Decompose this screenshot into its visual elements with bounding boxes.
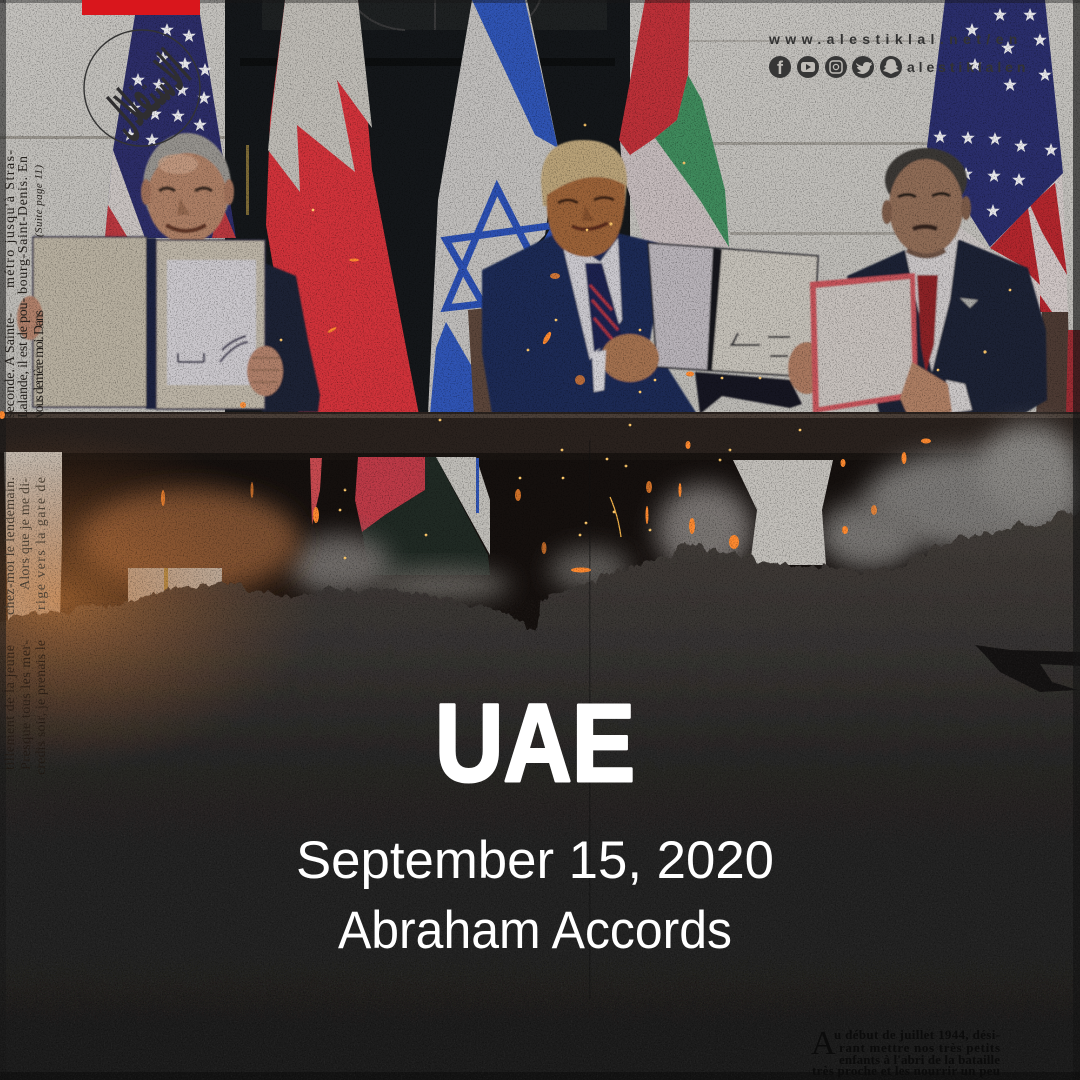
background: dark doorway [225,0,630,416]
website address: www.alestiklal.net/en [768,31,1023,47]
newspaper strip text: (Suite page 11) [33,165,45,237]
head [882,148,971,256]
icon: facebook: f [777,58,784,78]
under-table scene [0,457,1080,630]
suit [482,233,697,414]
hands [592,334,826,394]
wall gaps under the table [4,452,833,625]
newspaper strip text: credis soir, je prenais le [34,640,49,775]
social icons [769,56,902,78]
flag: left US flag [105,15,236,238]
newspaper fragment, bottom right [811,1025,1000,1078]
background: stone wall [0,0,1080,470]
suit [262,262,320,412]
logo: circular calligraphy seal: الاستقلال [91,39,202,148]
flag: Bahrain [266,0,426,532]
red tab [82,0,200,15]
newspaper strip text: Lalande, il est de pou- [16,298,31,418]
subtitle: Abraham Accords [338,901,732,960]
newspaper strip text: vous derrière moi. Dans [32,310,47,418]
date: September 15, 2020 [296,831,774,890]
person: left signer holding open folder [17,133,320,412]
flag: Israel [428,0,558,416]
person: right signer holding red folder [810,148,1047,416]
newspaper fragment, bottom right: A [811,1025,836,1062]
head [141,133,234,243]
person: center signer holding open folder [482,140,826,414]
title: UAE [435,682,635,805]
social handle: alestiklalen [907,59,1029,75]
table [0,412,1080,461]
newspaper strip text: Presque tous les mer- [19,640,34,770]
newspaper fragment, bottom right: très proche et les nourrir un peu [812,1063,1000,1078]
icon: twitter [852,56,874,78]
folder [33,237,265,409]
icon: instagram [825,56,847,78]
hands [17,296,283,396]
newspaper strip text: métro jusqu'à Stras- [3,150,18,288]
icon: snapchat [880,56,902,78]
newspaper strip text: Alors que je me di- [18,478,33,590]
newspaper fragment, bottom right: enfants à l'abri de la bataille [839,1052,1000,1067]
flag: UAE [619,0,729,247]
newspaper fragment, bottom right: rant mettre nos très petits [839,1040,1000,1055]
newspaper strip text: tillement de la jeune [3,645,18,770]
newspaper strip text [3,150,49,775]
star of David [446,188,556,330]
folder [648,243,818,377]
lapel pin [960,298,978,308]
torn dark paper [0,430,1080,1080]
suit [847,240,1047,416]
newspaper strip text: rige vers la gare de [34,477,49,610]
newspaper fragment, bottom right: u début de juillet 1944, dési- [834,1027,1000,1042]
flag: right US flag [927,0,1068,312]
shirt and tie [560,234,622,360]
newspaper strip text: seconde. A Sainte- [3,313,18,418]
chairs [468,308,1080,416]
shirt and tie [905,238,958,372]
embers and sparks [0,124,1011,572]
newspaper strip text: bourg-Saint-Denis. En [16,156,31,294]
hand and cuff [900,362,972,416]
red folder [810,273,918,413]
newspaper strip text: chez-moi le lendemain. [3,477,18,615]
icon: youtube [797,56,819,78]
head [541,140,627,257]
smoke [80,425,1080,601]
